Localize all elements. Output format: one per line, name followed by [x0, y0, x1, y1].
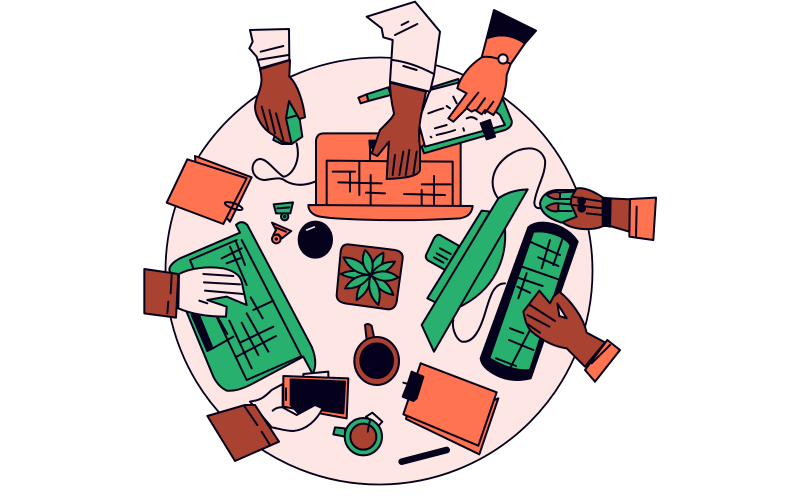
monitor lines [434, 248, 451, 263]
potted plant [337, 244, 403, 309]
left hand on mouse [249, 29, 305, 144]
mouse cable: top left [253, 143, 315, 185]
monitor: green [422, 189, 528, 352]
clipboard: orange [403, 363, 498, 454]
keyboard: black with green keys [481, 223, 578, 380]
binder clip: green [274, 202, 293, 220]
binder clip: orange [272, 223, 291, 243]
black ball [299, 222, 332, 258]
right hand on mouse [540, 188, 656, 240]
coffee mug: brown [354, 324, 399, 385]
right pointing hand with watch [448, 10, 536, 122]
left region [144, 156, 403, 391]
laptop: orange [308, 133, 473, 220]
pencil [358, 79, 459, 103]
monitor cable [453, 283, 505, 342]
monitor stand foot [426, 235, 459, 270]
laptop: green [169, 222, 315, 391]
bottom region [207, 324, 498, 462]
mouse cable: right [493, 148, 545, 208]
notebook: orange [167, 156, 252, 224]
round table [166, 58, 592, 484]
top region [249, 2, 536, 220]
left hand on laptop [144, 267, 247, 318]
black pen [402, 450, 447, 462]
center hand and sleeve [367, 2, 440, 179]
tea cup: green [333, 413, 382, 455]
right region [422, 148, 656, 382]
phone in hand [207, 372, 348, 461]
lower right hand on keyboard [523, 291, 620, 382]
clipboard: green with paper [418, 83, 512, 153]
